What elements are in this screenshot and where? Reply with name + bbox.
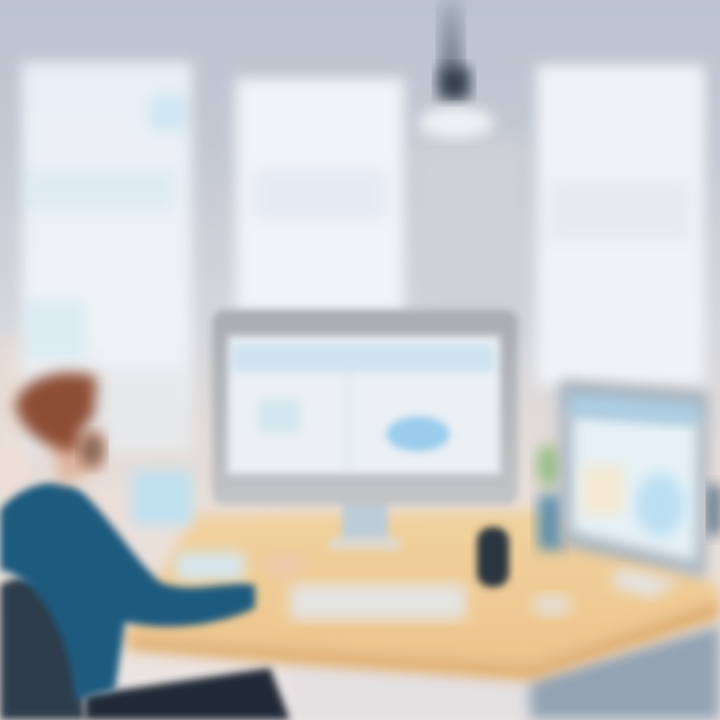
- speaker: [477, 527, 509, 587]
- ceiling lamp: [418, 0, 494, 139]
- keyboard: [290, 584, 466, 620]
- window: left: [22, 62, 192, 452]
- hand: [263, 553, 307, 577]
- window: centre: [236, 78, 404, 313]
- chair: [0, 578, 85, 720]
- neck and face: [50, 430, 105, 485]
- hair: [15, 372, 97, 452]
- desk: [120, 510, 720, 720]
- plant: [536, 444, 564, 550]
- window: right: [537, 65, 705, 385]
- beard: [80, 433, 104, 467]
- monitor frame: [212, 310, 518, 505]
- torso and arm: [0, 483, 255, 700]
- monitor screen: [228, 336, 500, 474]
- main monitor: [212, 310, 518, 550]
- person: [0, 372, 307, 720]
- side monitor: [560, 380, 720, 598]
- small tablet: [132, 470, 245, 580]
- mouse: [532, 594, 572, 616]
- legs: [85, 668, 290, 720]
- monitor stand: [330, 500, 400, 550]
